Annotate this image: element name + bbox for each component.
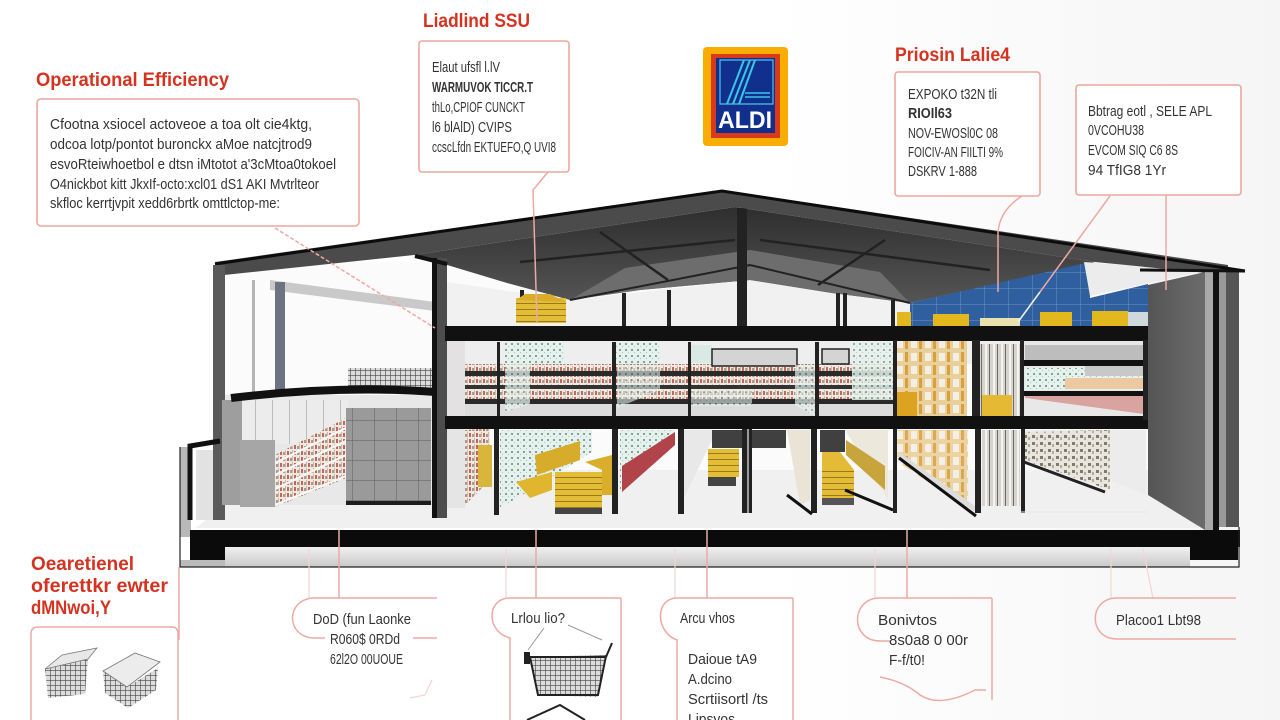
heading: bottom left — [31, 554, 169, 619]
panel: bottom 5 — [1095, 598, 1236, 639]
yellow crates — [516, 294, 854, 514]
panel: private label: DSKRV 1-888 — [908, 164, 977, 180]
left annex — [180, 265, 436, 537]
icon: wire crate right — [103, 653, 160, 708]
panel: right callout: Bbtrag eotl , SELE APL — [1088, 104, 1212, 120]
orange goods section — [897, 340, 1020, 505]
panel: limited SKU: l6 blAlD) CVIPS — [432, 120, 512, 136]
building cutaway — [180, 190, 1245, 567]
panel: bottom 1: R060$ 0RDd — [330, 632, 400, 648]
heading: limited SKU: Liadlind SSU — [423, 11, 530, 32]
heading: bottom left: Oearetienel — [31, 554, 134, 575]
heading: private label: Priosin Lalie4 — [895, 45, 1010, 66]
heading: bottom left: dMNwoi,Y — [31, 598, 111, 619]
panel: bottom 3: Daioue tA9 — [688, 652, 757, 668]
logo: ALDI — [718, 107, 772, 134]
panel: bottom 5: Placoo1 Lbt98 — [1116, 613, 1201, 629]
panel: operational efficiency — [37, 99, 359, 226]
logo — [703, 47, 788, 146]
roof band — [215, 190, 1245, 275]
panel: bottom 3 — [660, 598, 793, 720]
panel: operational efficiency: O4nickbot kitt JkxIf-octo:xcl01 dS1 AKI Mvtrlteor — [50, 177, 319, 193]
icon: wire crate left — [45, 648, 97, 698]
icon: shopping basket — [524, 625, 612, 697]
icon: basket handle — [527, 705, 585, 720]
panel: right callout — [1076, 85, 1241, 195]
panel: limited SKU: thLo,CPIOF CUNCKT — [432, 100, 525, 116]
panel: bottom 4: Bonivtos — [878, 613, 937, 629]
back wall and interior — [224, 262, 1149, 505]
panel: limited SKU — [419, 41, 569, 172]
panel: crates — [31, 627, 178, 720]
panel: operational efficiency: odcoa lotp/pontot buronckx aMoe natcjtrod9 — [50, 137, 312, 153]
panel: bottom 1: DoD (fun Laonke — [313, 612, 411, 628]
panel: limited SKU: ccscLfdn EKTUEFO,Q UVI8 — [432, 140, 556, 156]
rear ceiling panels — [570, 250, 910, 303]
panel: bottom 3: Scrtiisortl /ts — [688, 692, 768, 708]
panel: right callout: 94 TfIG8 1Yr — [1088, 163, 1166, 179]
foundation — [180, 447, 1240, 567]
roof trusses and back columns — [520, 208, 990, 328]
panel: limited SKU: WARMUVOK TICCR.T — [432, 80, 533, 96]
panel: bottom 1: 62l2O 00UOUE — [330, 652, 403, 668]
panel: bottom 3: Arcu vhos — [680, 611, 735, 627]
right rooms — [1024, 340, 1146, 495]
heading: operational efficiency: Operational Efficiency — [36, 70, 229, 91]
floor — [196, 470, 1200, 528]
panel: bottom 4: 8s0a8 0 00r — [889, 633, 968, 649]
panel: right callout: EVCOM SIQ C6 8S — [1088, 143, 1178, 159]
panel: operational efficiency: esvoRteiwhoetbol e dtsn iMtotot a'3cMtoa0tokoel — [50, 157, 336, 173]
panel: bottom 2 — [492, 598, 621, 720]
panel: private label — [895, 72, 1040, 196]
panel: operational efficiency: Cfootna xsiocel actoveoe a toa olt cie4ktg, — [50, 117, 312, 133]
heading: bottom left: oferettkr ewter — [31, 576, 169, 597]
panel: private label: EXPOKO t32N tli — [908, 87, 997, 103]
upper floor shelving — [447, 340, 1147, 418]
right wall — [1140, 270, 1245, 532]
lower aisles — [447, 428, 1020, 512]
upper yellow stock row — [897, 311, 1148, 326]
panel: private label: RIOIl63 — [908, 106, 952, 122]
blue window wall — [910, 262, 1148, 326]
panel: limited SKU: Elaut ufsfl l.lV — [432, 60, 500, 76]
panel: bottom 2: Lrlou lio? — [511, 611, 565, 627]
panel: bottom 1 — [292, 598, 437, 698]
connector lines — [179, 172, 1166, 640]
annex shelving — [275, 418, 346, 507]
ceiling underside — [414, 207, 1095, 303]
panel: operational efficiency: skfloc kerrtjvpit xedd6rbrtk omttlctop-me: — [50, 196, 280, 212]
panel: bottom 3: A.dcino — [688, 672, 732, 688]
panel: right callout: 0VCOHU38 — [1088, 123, 1144, 139]
panel: bottom 4 — [858, 598, 992, 700]
panel: private label: FOICIV-AN FIILTI 9% — [908, 145, 1003, 161]
structural frame — [415, 256, 1149, 518]
panel: private label: NOV-EWOSl0C 08 — [908, 126, 998, 142]
panel: bottom 4: F-f/t0! — [889, 653, 925, 669]
